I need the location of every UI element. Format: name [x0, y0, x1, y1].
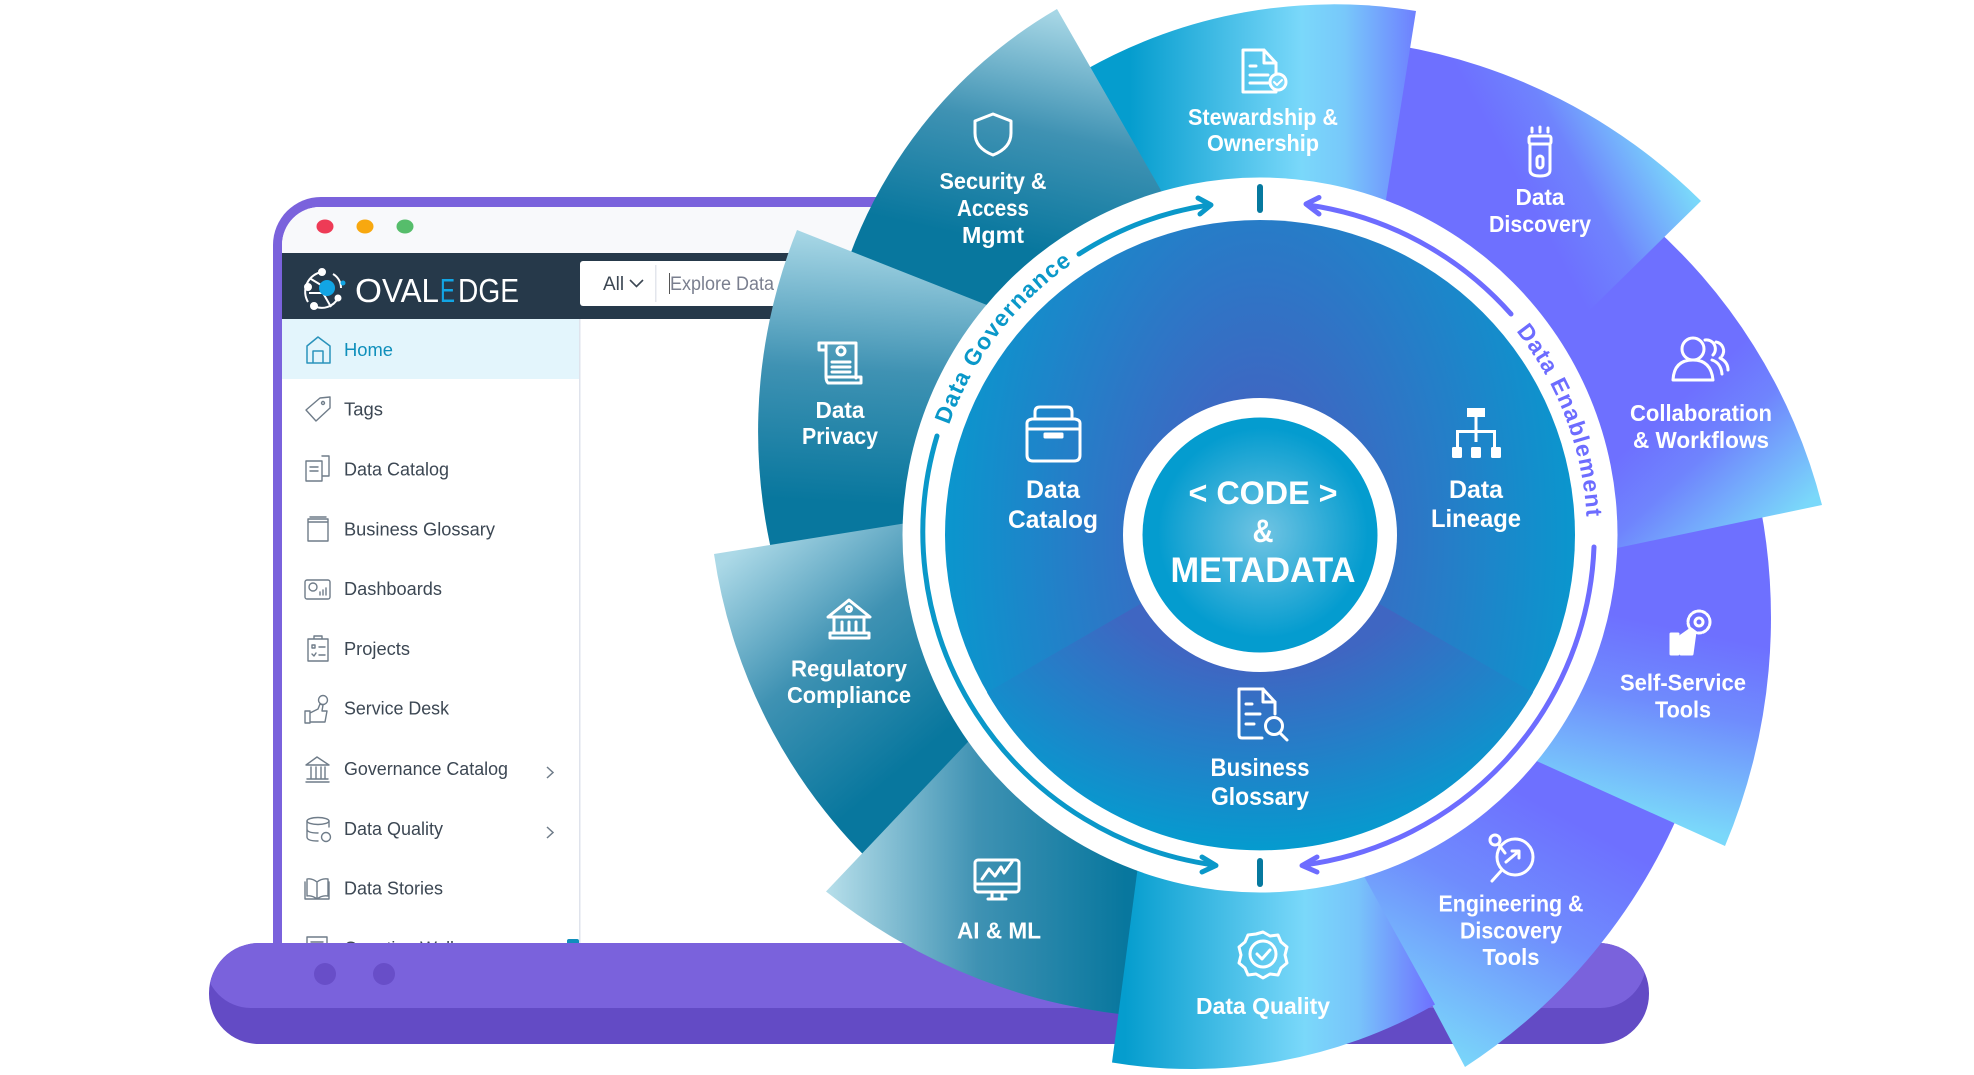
label: Discovery [1489, 211, 1591, 237]
menu item: Tags [306, 397, 383, 421]
laptop illustration [205, 197, 1649, 1044]
inner disc [945, 220, 1575, 850]
icon: hierarchy tree [1452, 408, 1501, 458]
logo wordmark: E [440, 272, 455, 309]
menu item: Service Desk [305, 696, 450, 723]
menu item: Data Catalog: Data Catalog [344, 460, 449, 480]
icon: people [1673, 338, 1728, 380]
menu item: Governance Catalog: Governance Catalog [344, 759, 508, 779]
menu item: Business Glossary [308, 517, 495, 541]
circular wheel diagram [714, 4, 1822, 1069]
label: Compliance [787, 682, 911, 708]
label [1620, 670, 1746, 722]
label: Data Quality [1196, 993, 1330, 1019]
menu item: Home highlighted: Home [344, 340, 393, 360]
label: Data [1026, 476, 1081, 504]
window control dots [316, 220, 414, 234]
icon: institution building [828, 600, 870, 638]
icon: shield [975, 114, 1011, 155]
label: Access [957, 195, 1029, 221]
petal: Data Quality [1112, 775, 1435, 1069]
label: Discovery [1460, 918, 1562, 944]
label: Privacy [802, 423, 878, 449]
menu item: Business Glossary: Business Glossary [344, 520, 495, 540]
arrow: governance to bottom [923, 436, 1216, 872]
sidebar divider [579, 319, 580, 949]
icon: magnifier with arrow [1490, 835, 1533, 881]
laptop screen [282, 207, 903, 943]
label: Business [1210, 754, 1310, 782]
center hub: code and metadata: METADATA [1170, 551, 1356, 590]
petal: AI & ML [826, 645, 1200, 1017]
menu item: Data Catalog [306, 456, 449, 481]
search box [580, 261, 786, 306]
arrow: enablement to bottom [1302, 547, 1594, 872]
label: Tools [1655, 696, 1711, 722]
center hub: code and metadata [1123, 398, 1397, 672]
label: AI & ML [957, 918, 1041, 944]
label: Data [1516, 184, 1565, 210]
label: Catalog [1008, 506, 1098, 534]
petal: Collaboration & Workflows [1480, 215, 1822, 560]
base hinge dots [314, 963, 395, 985]
segment: Data Lineage [1431, 408, 1521, 533]
menu item: Projects: Projects [344, 639, 410, 659]
petal: Security & Access Mgmt [840, 9, 1190, 400]
petal: Stewardship & Ownership [1085, 4, 1416, 300]
label: Glossary [1211, 783, 1309, 811]
menu item: Data Quality: Data Quality [344, 819, 443, 839]
label: Collaboration [1630, 400, 1772, 426]
label [1008, 476, 1098, 534]
laptop base [209, 943, 1649, 1044]
petal: Data Discovery [1340, 45, 1701, 398]
center hub: code and metadata: & [1252, 513, 1274, 549]
icon: flashlight [1529, 127, 1551, 176]
white ring [902, 178, 1618, 892]
label [1438, 890, 1584, 970]
logo wordmark: VAL [382, 272, 439, 309]
top divider tick [1257, 184, 1263, 213]
search box: Explore Data [670, 274, 774, 295]
label: Ownership [1207, 130, 1319, 156]
label: Data [1449, 476, 1504, 504]
label: Data [816, 397, 865, 423]
bottom divider tick [1257, 858, 1263, 887]
label [802, 397, 878, 449]
icon: document with magnifier [1239, 689, 1287, 740]
icon: privacy scroll [819, 343, 861, 383]
OvalEdge logo [305, 269, 519, 309]
logo wordmark [356, 278, 518, 302]
label [940, 168, 1046, 248]
logo mark [305, 269, 346, 309]
logo wordmark: O [355, 272, 382, 309]
menu item: Tags: Tags [344, 400, 383, 420]
segment: Data Catalog [1008, 407, 1098, 534]
label: Self-Service [1620, 670, 1746, 696]
icon: document with check [1243, 50, 1286, 92]
label [1431, 476, 1521, 533]
petal: Regulatory Compliance [714, 508, 1050, 880]
menu item: Question Wall, partly hidden: Question Wall [344, 938, 454, 958]
label: Engineering & [1438, 890, 1584, 916]
center hub: code and metadata: < CODE > [1188, 475, 1338, 511]
label [787, 656, 911, 708]
arrow: enablement to top [1306, 198, 1511, 314]
label: & Workflows [1633, 427, 1769, 453]
menu item: Data Stories [305, 878, 443, 899]
label: Tools [1482, 944, 1540, 970]
app header bar [282, 253, 788, 319]
icon: archive box [1027, 407, 1080, 461]
icon: monitor with chart [975, 860, 1019, 899]
curved label: Data Enablement: Data Enablement [1517, 322, 1602, 516]
curved label: Data Governance: Data Governance [934, 256, 1070, 424]
laptop bezel [273, 197, 1000, 955]
window title bar [282, 207, 318, 244]
label: Security & [940, 168, 1046, 194]
petal: Self-Service Tools [1470, 490, 1771, 846]
label [1210, 754, 1310, 811]
label: Stewardship & [1188, 104, 1338, 130]
petal: Data Privacy [758, 230, 1040, 600]
menu item: Dashboards: Dashboards [344, 579, 442, 599]
search box: All [603, 274, 624, 295]
label [1489, 184, 1591, 237]
icon: hand and gear [1671, 611, 1710, 654]
label: Mgmt [962, 222, 1024, 248]
label: Lineage [1431, 505, 1521, 533]
menu item: Governance Catalog [306, 757, 553, 782]
label [1630, 400, 1772, 453]
petal: Engineering & Discovery Tools [1310, 700, 1700, 1067]
menu item: Data Quality [307, 818, 553, 842]
label: Regulatory [791, 656, 907, 682]
menu item: Data Stories: Data Stories [344, 878, 443, 898]
segment: Business Glossary [1210, 689, 1310, 811]
label [1188, 104, 1338, 156]
menu item: Projects [308, 636, 410, 661]
logo wordmark: DGE [458, 272, 519, 309]
menu item: Question Wall, partly hidden [306, 936, 579, 943]
arrow: governance to top [1079, 198, 1211, 254]
menu item: Service Desk: Service Desk [344, 698, 450, 718]
menu item: Home highlighted [282, 319, 579, 379]
icon: quality badge [1239, 932, 1287, 978]
